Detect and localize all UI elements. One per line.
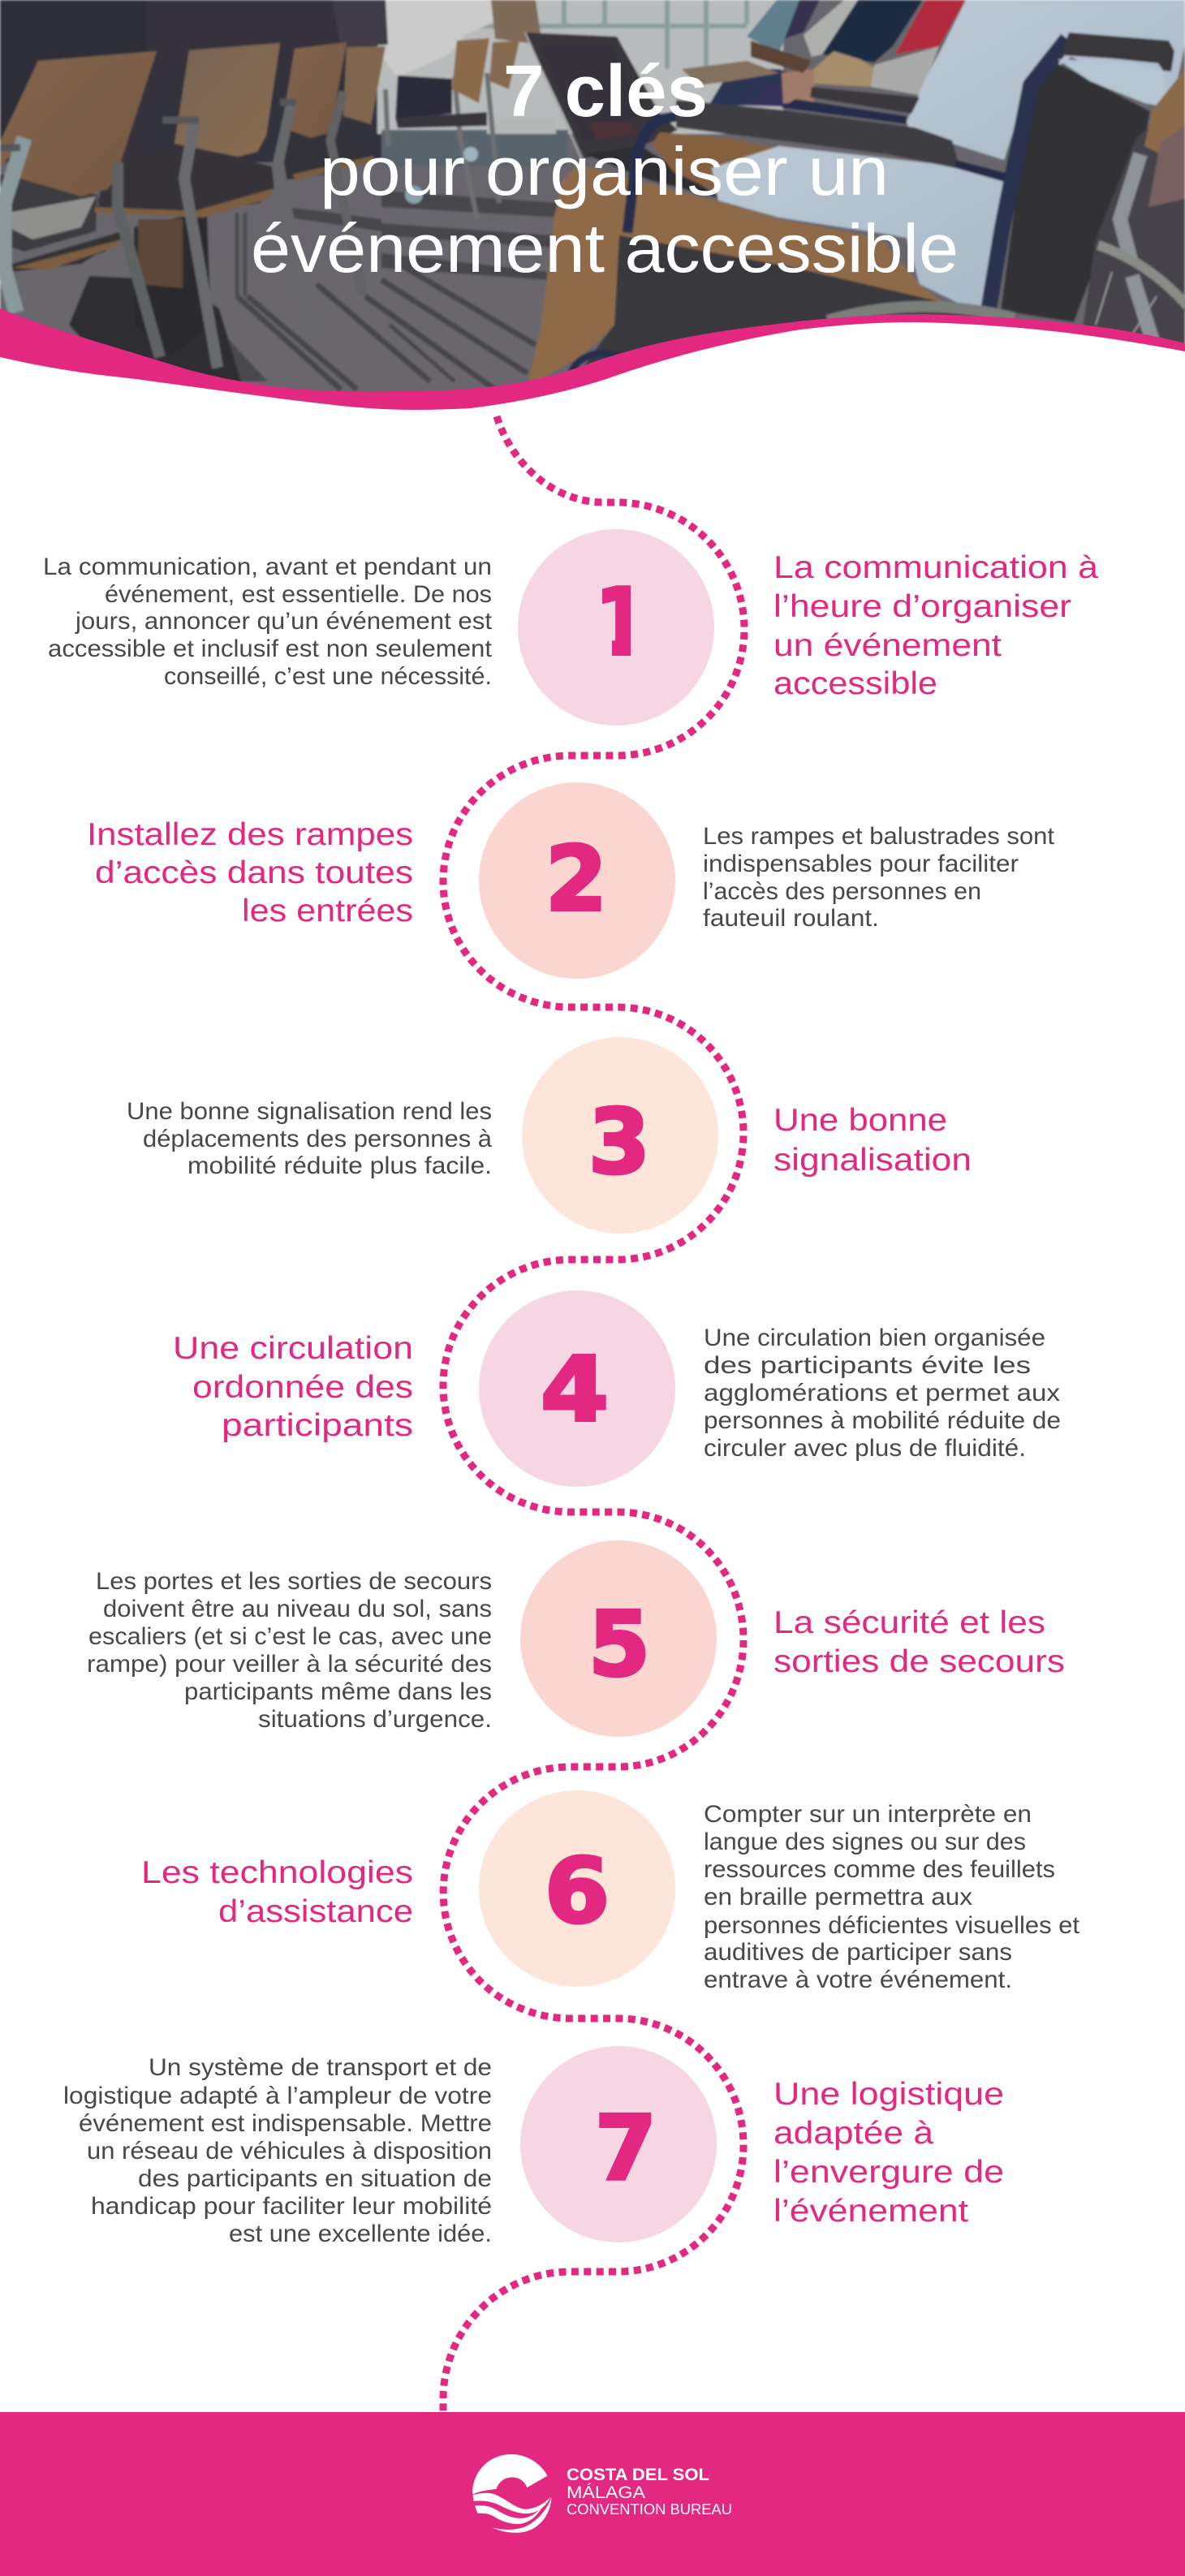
heading 1: accessible xyxy=(773,666,937,701)
heading 1: un événement xyxy=(773,628,1002,663)
description 2: l’accès des personnes en xyxy=(703,878,981,905)
heading 5: La sécurité et les xyxy=(773,1605,1045,1640)
number circle 7: 7 xyxy=(595,2096,657,2200)
heading 3: Une bonne xyxy=(773,1103,947,1138)
number circle 2: 2 xyxy=(545,827,607,931)
panel: step 7 xyxy=(63,2046,1004,2247)
description 6: auditives de participer sans xyxy=(704,1939,1012,1966)
heading 3 xyxy=(773,1103,972,1178)
number circle 6 xyxy=(479,1790,675,1987)
title: événement accessible xyxy=(251,210,959,286)
heading 6: Les technologies xyxy=(141,1855,413,1890)
description 1: événement, est essentielle. De nos xyxy=(105,581,492,608)
heading 7: l’envergure de xyxy=(773,2155,1004,2190)
description 7: Un système de transport et de xyxy=(149,2054,492,2081)
heading 4: ordonnée des xyxy=(192,1370,413,1405)
logo text: COSTA DEL SOL xyxy=(567,2466,709,2484)
number circle 5: 5 xyxy=(588,1592,650,1696)
description 5: rampe) pour veiller à la sécurité des xyxy=(87,1651,492,1678)
heading 4: participants xyxy=(222,1408,413,1443)
description 5: participants même dans les xyxy=(184,1678,492,1705)
description 7: événement est indispensable. Mettre xyxy=(79,2110,492,2137)
dotted connecting path xyxy=(443,416,744,2427)
panel: step 5 xyxy=(87,1540,1065,1737)
chair legs xyxy=(0,73,499,368)
wheelchair xyxy=(1001,59,1150,322)
panel: step 1 xyxy=(43,529,1098,726)
description 4: personnes à mobilité réduite de xyxy=(704,1407,1061,1434)
description 5: escaliers (et si c’est le cas, avec une xyxy=(88,1623,492,1650)
logo text xyxy=(567,2466,732,2518)
description 7: un réseau de véhicules à disposition xyxy=(87,2138,492,2165)
heading 4: Une circulation xyxy=(173,1331,413,1366)
description 5: situations d’urgence. xyxy=(258,1706,492,1733)
description 7: handicap pour faciliter leur mobilité xyxy=(91,2193,492,2220)
description 7: est une excellente idée. xyxy=(229,2221,492,2247)
description 4: agglomérations et permet aux xyxy=(704,1380,1060,1406)
description 6: personnes déficientes visuelles et xyxy=(704,1912,1079,1939)
heading 6: d’assistance xyxy=(218,1894,413,1929)
description 5: Les portes et les sorties de secours xyxy=(96,1568,492,1595)
logo text: CONVENTION BUREAU xyxy=(567,2501,732,2518)
description 6: Compter sur un interprète en xyxy=(704,1801,1032,1828)
right background and wheel xyxy=(1079,97,1185,349)
number circle 4: 4 xyxy=(541,1338,609,1441)
title xyxy=(251,51,959,286)
description 3: Une bonne signalisation rend les xyxy=(127,1098,492,1125)
heading 7: l’événement xyxy=(773,2194,968,2229)
description 3 xyxy=(127,1098,493,1179)
shirt xyxy=(907,0,1185,160)
hand xyxy=(652,132,795,191)
description 1: La communication, avant et pendant un xyxy=(43,554,492,580)
footer band xyxy=(0,2412,1185,2576)
description 7: des participants en situation de xyxy=(138,2165,492,2192)
description 7 xyxy=(63,2054,492,2247)
number circle 3 xyxy=(522,1037,718,1234)
number circle 3: 3 xyxy=(588,1090,650,1194)
seats xyxy=(95,188,274,218)
description 6: ressources comme des feuillets xyxy=(704,1856,1055,1883)
description 2: Les rampes et balustrades sont xyxy=(703,823,1054,850)
number circle 5 xyxy=(520,1540,717,1737)
description 6 xyxy=(704,1801,1079,1993)
heading 7 xyxy=(773,2077,1004,2229)
heading 1 xyxy=(773,550,1098,701)
background seats xyxy=(452,38,489,103)
number circle 2 xyxy=(479,782,675,979)
heading 3: signalisation xyxy=(773,1143,972,1178)
icon: Costa del Sol logo mark xyxy=(472,2454,551,2533)
floor shadows xyxy=(288,191,560,280)
title: pour organiser un xyxy=(320,133,889,209)
description 2 xyxy=(703,823,1054,932)
description 4: circuler avec plus de fluidité. xyxy=(704,1435,1026,1462)
laptop xyxy=(525,32,678,158)
description 5: doivent être au niveau du sol, sans xyxy=(103,1596,492,1622)
chair backs xyxy=(0,51,157,196)
heading 2 xyxy=(87,817,413,928)
panel: step 6 xyxy=(141,1790,1079,1993)
description 4: des participants évite les xyxy=(704,1352,1031,1379)
panel: step 2 xyxy=(87,782,1054,979)
number circle 4 xyxy=(479,1290,675,1487)
heading 7: Une logistique xyxy=(773,2077,1004,2112)
trousers xyxy=(528,165,942,386)
description 6: en braille permettra aux xyxy=(704,1884,972,1910)
heading 1: l’heure d’organiser xyxy=(773,589,1071,624)
description 5 xyxy=(87,1568,492,1733)
title: 7 clés xyxy=(503,51,708,132)
description 1 xyxy=(43,554,492,690)
header photo: wheelchair user at a conference xyxy=(0,0,1185,414)
number circle 6: 6 xyxy=(545,1839,610,1943)
number circle 1: 1 xyxy=(595,569,649,676)
heading 5 xyxy=(773,1605,1065,1679)
heading 4 xyxy=(173,1331,413,1443)
number circle 7 xyxy=(520,2046,717,2242)
heading 7: adaptée à xyxy=(773,2116,933,2151)
description 6: langue des signes ou sur des xyxy=(704,1829,1026,1855)
description 7: logistique adapté à l’ampleur de votre xyxy=(63,2083,492,2109)
panel: step 4 xyxy=(173,1290,1061,1487)
heading 5: sorties de secours xyxy=(773,1644,1065,1679)
heading 2: les entrées xyxy=(242,894,413,928)
description 2: indispensables pour faciliter xyxy=(703,851,1019,877)
number circle 1 xyxy=(518,529,714,726)
background people xyxy=(779,0,820,41)
logo text: MÁLAGA xyxy=(567,2483,645,2502)
heading 2: Installez des rampes xyxy=(87,817,413,852)
pink wave band xyxy=(0,308,1185,426)
description 1: accessible et inclusif est non seulement xyxy=(48,635,492,662)
heading 6 xyxy=(141,1855,413,1929)
description 1: jours, annoncer qu’un événement est xyxy=(75,608,492,635)
description 3: déplacements des personnes à xyxy=(143,1126,493,1152)
description 4 xyxy=(704,1325,1061,1462)
description 3: mobilité réduite plus facile. xyxy=(187,1152,492,1179)
description 1: conseillé, c’est une nécessité. xyxy=(164,663,492,690)
heading 2: d’accès dans toutes xyxy=(95,855,413,890)
heading 1: La communication à xyxy=(773,550,1098,585)
white wave area xyxy=(0,322,1185,430)
panel: step 3 xyxy=(127,1037,972,1234)
description 2: fauteuil roulant. xyxy=(703,905,879,932)
description 6: entrave à votre événement. xyxy=(704,1966,1012,1993)
description 4: Une circulation bien organisée xyxy=(704,1325,1045,1351)
